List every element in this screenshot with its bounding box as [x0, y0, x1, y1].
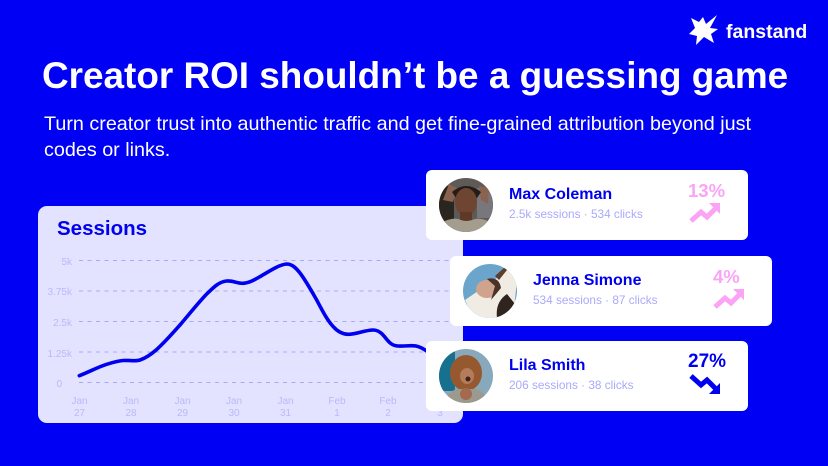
card: Jenna Simone	[450, 256, 772, 326]
brand name: fanstand	[726, 21, 807, 43]
y axis labels: 1.25k	[48, 349, 73, 360]
x axis labels: Jan	[174, 396, 191, 407]
y axis labels	[48, 257, 73, 390]
x axis labels: 31	[280, 408, 291, 419]
x axis labels: Jan	[123, 396, 139, 407]
name: Max Coleman	[509, 186, 612, 202]
subtitle: Turn creator trust into authentic traffic and get fine-grained attribution beyond just	[44, 113, 751, 135]
x axis labels: Jan	[277, 396, 294, 407]
avatar: Jenna Simone	[463, 264, 517, 318]
stats: 2.5k sessions · 534 clicks	[509, 207, 643, 221]
stats: 206 sessions · 38 clicks	[509, 378, 634, 392]
subtitle	[44, 113, 751, 161]
x axis labels: Jan	[226, 396, 242, 407]
y axis labels: 0	[56, 379, 62, 390]
x axis labels: 1	[334, 408, 340, 419]
stats: 534 sessions · 87 clicks	[533, 293, 658, 307]
subtitle: codes or links.	[44, 139, 170, 161]
x axis labels: Feb	[379, 396, 397, 407]
card: Max Coleman	[426, 170, 748, 240]
icon: starburst	[689, 15, 718, 45]
name: Jenna Simone	[533, 272, 641, 288]
avatar: Lila Smith	[439, 349, 493, 403]
panel heading: Sessions	[57, 217, 147, 240]
y axis labels: 5k	[61, 257, 73, 268]
change: 13% up: 13%	[688, 180, 725, 201]
x axis labels: 27	[74, 408, 85, 419]
avatar: Max Coleman	[439, 178, 493, 232]
change: 4% up: 4%	[713, 266, 740, 287]
card: Lila Smith	[426, 341, 748, 411]
icon: trending up	[689, 203, 720, 223]
x axis labels	[71, 396, 443, 419]
x axis labels: 30	[228, 408, 240, 419]
line chart	[48, 257, 448, 419]
title: Creator ROI shouldn’t be a guessing game	[42, 55, 788, 96]
icon: trending down	[689, 374, 720, 394]
x axis labels: 3	[437, 408, 443, 419]
panel: sessions chart	[38, 206, 463, 423]
change: 27% down: 27%	[688, 351, 726, 372]
x axis labels: 29	[177, 408, 188, 419]
logo: fanstand	[689, 15, 807, 45]
x axis labels: 2	[385, 408, 391, 419]
name: Lila Smith	[509, 356, 585, 374]
x axis labels: Jan	[71, 396, 88, 407]
icon: trending up	[713, 289, 744, 309]
sessions curve	[79, 264, 428, 376]
y axis labels: 3.75k	[48, 287, 73, 298]
y axis labels: 2.5k	[53, 318, 73, 329]
x axis labels: Feb	[328, 396, 346, 407]
x axis labels: 28	[125, 408, 137, 419]
